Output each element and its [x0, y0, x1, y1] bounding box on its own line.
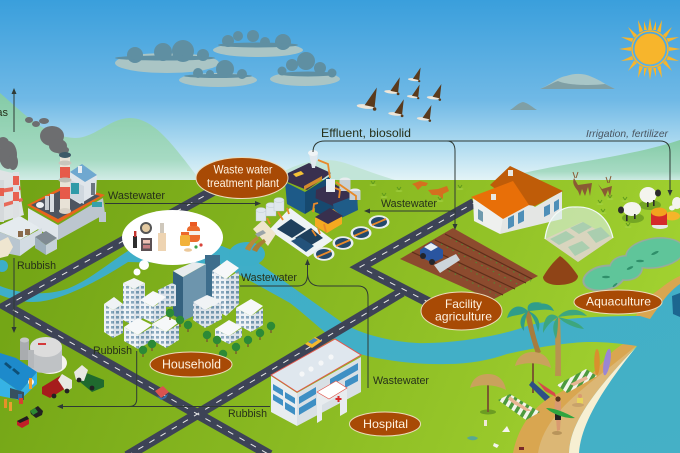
child on the sand — [572, 394, 584, 407]
settling basins — [269, 208, 333, 257]
soil mound — [543, 256, 578, 285]
callout: household: Household — [162, 358, 221, 372]
callout: facility agriculture: agriculture — [435, 310, 492, 324]
callout: waste water treatment plant: Waste water — [214, 162, 272, 176]
callout: aquaculture: Aquaculture — [586, 294, 651, 308]
cosmetics — [133, 222, 166, 251]
tractor — [420, 242, 460, 273]
factory chimney — [58, 152, 72, 214]
hospital — [271, 339, 361, 426]
greenhouse — [545, 207, 613, 262]
aquaculture pond — [580, 233, 680, 295]
label: rubbish factory: Rubbish — [17, 260, 56, 272]
dumpsters — [17, 406, 43, 428]
callout: waste water treatment plant: treatment plant — [207, 176, 280, 190]
cooling towers and chimneys — [0, 170, 24, 228]
block center left — [140, 291, 166, 323]
arrow: household wastewater — [240, 259, 368, 388]
arrow: gas up — [12, 88, 16, 132]
workers and bins — [4, 378, 32, 411]
callout: facility agriculture: Facility — [445, 297, 482, 311]
factory — [27, 164, 106, 240]
label: farm wastewater: Wastewater — [381, 198, 437, 210]
roads — [6, 190, 474, 453]
front block left — [124, 318, 152, 349]
front block right — [152, 316, 179, 348]
green truck — [74, 365, 104, 392]
callout: waste water treatment plant — [196, 158, 288, 198]
label: household wastewater: Wastewater — [241, 272, 297, 284]
waste water treatment plant — [245, 150, 390, 261]
label: irrigation, fertilizer: Irrigation, fertilizer — [586, 128, 668, 140]
callout: aquaculture — [574, 290, 662, 314]
beach towels and sunbathers — [498, 369, 597, 420]
palm trees — [507, 302, 587, 376]
low block — [215, 320, 242, 344]
household buildings — [104, 255, 263, 349]
sky — [0, 0, 680, 182]
callout: hospital — [350, 412, 420, 436]
label: effluent, biosolid: Effluent, biosolid — [321, 126, 411, 140]
river and sea — [0, 242, 680, 453]
arrow: effluent and biosolid lines — [313, 141, 672, 230]
sand beach — [513, 276, 680, 453]
right block — [236, 299, 263, 332]
recycling plant — [0, 337, 104, 428]
surfer and board — [546, 396, 575, 435]
concrete outlet and pipes — [245, 220, 276, 252]
farmland — [400, 228, 538, 300]
flock of birds — [357, 68, 441, 122]
blue warehouse — [0, 353, 37, 400]
far left block — [104, 297, 123, 338]
red truck — [42, 374, 72, 398]
silos — [20, 337, 67, 374]
orange pipes — [267, 160, 356, 236]
main glass tower — [173, 262, 206, 321]
label: household rubbish: Rubbish — [93, 345, 132, 357]
arrow: rubbish to recycling plant — [57, 351, 270, 409]
label: hospital rubbish: Rubbish — [228, 408, 267, 420]
beach umbrellas — [470, 352, 551, 414]
deck chair — [529, 381, 556, 401]
back block — [158, 283, 176, 308]
farm house — [471, 166, 563, 234]
tower left — [123, 278, 145, 326]
orange pump house — [315, 208, 343, 233]
beach litter — [467, 420, 524, 450]
label: factory wastewater: Wastewater — [108, 190, 165, 202]
lower factory buildings — [0, 216, 57, 258]
arrow: factory wastewater — [105, 201, 261, 206]
smoke — [0, 117, 69, 170]
surfboards — [594, 348, 612, 376]
arrow: farm wastewater — [364, 208, 455, 214]
main blue building — [285, 163, 358, 221]
grass tufts — [370, 181, 632, 228]
clouds — [115, 30, 615, 110]
fish cage — [672, 293, 680, 317]
storage tanks — [256, 198, 284, 221]
callout: facility agriculture — [421, 292, 502, 330]
dark tower — [205, 255, 220, 305]
mid block — [193, 295, 222, 328]
foxes — [412, 181, 449, 199]
callout: household — [150, 352, 232, 377]
hills — [0, 93, 680, 182]
tall white block — [212, 260, 239, 316]
cars on the road — [155, 337, 322, 400]
deer — [573, 172, 612, 197]
animal feeder — [651, 208, 680, 229]
ground — [0, 180, 680, 453]
pills — [180, 222, 203, 252]
hopper and tanks — [308, 150, 360, 200]
callout: hospital: Hospital — [363, 417, 408, 431]
arrow: rubbish to recycling — [12, 258, 16, 333]
sun — [619, 18, 680, 80]
trees — [139, 309, 275, 361]
label: hospital wastewater: Wastewater — [373, 375, 429, 387]
sheep — [618, 187, 680, 223]
circular clarifiers — [314, 215, 390, 261]
bubble of household products — [122, 210, 223, 276]
